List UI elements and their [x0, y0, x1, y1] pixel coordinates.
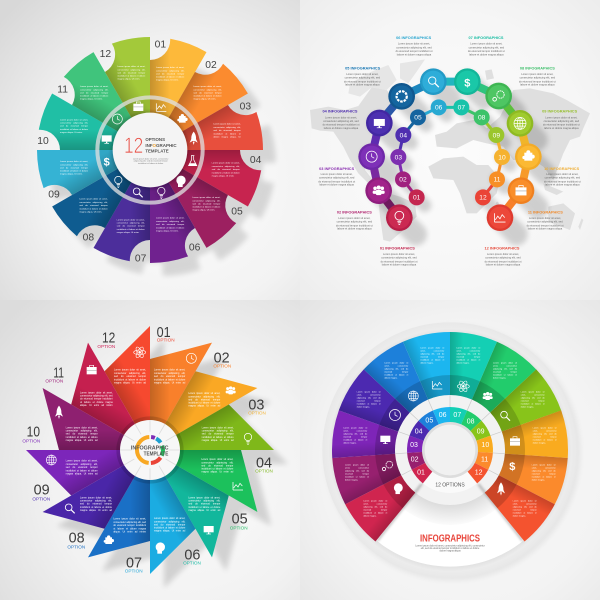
panel background [300, 0, 600, 300]
segment 12 [450, 461, 555, 546]
blade 10: OPTION [22, 438, 40, 443]
step 12: do eiusmod tempor incididunt ut [485, 260, 521, 263]
step 06: do eiusmod tempor incididunt ut [396, 50, 432, 53]
step 07: 07 INFOGRAPHICS [468, 35, 504, 40]
segment 01: Lorem ipsum dolor sit amet, consectetur adipiscing elit, sed do eiusmod tempor incididunt ut labore et dolore magna. [363, 500, 387, 517]
center title: adipiscing elit, sed do eiusmod tempor [134, 160, 168, 163]
step 12: 12 INFOGRAPHICS [484, 245, 520, 250]
blade 07 [125, 450, 196, 574]
step 11: consectetur adipiscing elit, sed [527, 220, 563, 223]
blade 07: 07 [126, 555, 142, 571]
step 03: 03 [395, 154, 402, 161]
step 01: do eiusmod tempor incididunt ut [381, 260, 417, 263]
sector 07: Lorem ipsum dolor sit amet, consectetur adipiscing elit, sed do eiusmod tempor incididunt ut labore et dolore magna aliqua. Ut enim. [117, 219, 145, 234]
sector 02: Lorem ipsum dolor sit amet, consectetur adipiscing elit, sed do eiusmod tempor incididunt ut labore et dolore magna aliqua. Ut enim. [193, 85, 222, 100]
step 04: 04 [400, 132, 407, 139]
wedge caption: dolore magna aliqua [439, 550, 461, 553]
blade 05: 05 [232, 512, 248, 528]
step 11 [489, 171, 567, 232]
blade 08: 08 [69, 531, 85, 547]
sector 02: 02 [205, 60, 217, 71]
panel background [0, 0, 300, 300]
segment 05 [364, 335, 464, 433]
step 11: do eiusmod tempor incididunt ut [527, 224, 563, 227]
sector 05 [122, 150, 246, 255]
outer chain connectors [372, 82, 528, 218]
segment 11: Lorem ipsum dolor sit amet, consectetur adipiscing elit, sed do eiusmod tempor incididunt ut labore et dolore magna. [532, 464, 556, 481]
step 09: 09 INFOGRAPHICS [542, 109, 577, 114]
inner chain connectors [398, 107, 502, 197]
segment 05: Lorem ipsum dolor sit amet, consectetur adipiscing elit, sed do eiusmod tempor incididunt ut labore et dolore magna. [384, 362, 408, 379]
segment 08: Lorem ipsum dolor sit amet, consectetur adipiscing elit, sed do eiusmod tempor incididunt ut labore et dolore magna. [493, 362, 517, 379]
blade 11: 11 [53, 365, 64, 381]
blade 02: OPTION [213, 364, 231, 369]
sector 01: 01 [155, 40, 166, 51]
step 08: do eiusmod tempor incididunt ut [519, 80, 556, 83]
sector 03 [150, 94, 275, 199]
segment 08: 08 [467, 418, 475, 425]
step 01: labore et dolore magna aliqua [382, 263, 416, 266]
step 12: consectetur adipiscing elit, sed [485, 256, 521, 259]
blade 07: OPTION [125, 569, 143, 574]
blade 05: OPTION [230, 525, 248, 530]
step 05: consectetur adipiscing elit, sed [345, 76, 380, 79]
step 09: 09 [493, 132, 500, 139]
blade 09 [32, 450, 173, 551]
step 08 [474, 65, 559, 125]
step 09 [488, 109, 583, 143]
blade 11: OPTION [45, 379, 63, 384]
step 05: 05 INFOGRAPHICS [345, 65, 380, 70]
sector 03: 03 [240, 101, 251, 112]
sector 11: Lorem ipsum dolor sit amet, consectetur adipiscing elit, sed do eiusmod tempor incididunt ut labore et dolore magna aliqua. Ut enim. [80, 85, 108, 100]
step 05: labore et dolore magna aliqua [345, 83, 380, 86]
sector 08: Lorem ipsum dolor sit amet, consectetur adipiscing elit, sed do eiusmod tempor incididunt ut labore et dolore magna aliqua. Ut enim. [79, 198, 108, 213]
step 02: Lorem ipsum dolor sit amet, [338, 217, 370, 220]
segment 01: 01 [417, 470, 425, 477]
step 07: labore et dolore magna aliqua [469, 53, 504, 56]
step 09: labore et dolore magna aliqua [544, 127, 579, 130]
panel: 12 options wheel with notched sectors [0, 0, 300, 300]
step 11: 11 [494, 177, 501, 184]
step 08: labore et dolore magna aliqua [520, 83, 555, 86]
wedge caption: Lorem ipsum dolor sit amet, consectetur adipiscing elit, consectetur [415, 544, 485, 547]
blade 09: 09 [34, 483, 50, 499]
center title: Lorem ipsum dolor sit amet, consectetur [133, 157, 169, 160]
step 08: Lorem ipsum dolor sit amet, [521, 73, 553, 76]
segment 08 [460, 342, 540, 446]
step 01: 01 INFOGRAPHICS [380, 245, 415, 250]
segment 05: 05 [425, 418, 433, 425]
step 12: labore et dolore magna aliqua [486, 263, 520, 266]
blade 12: 12 [102, 330, 115, 346]
segment 02: Lorem ipsum dolor sit amet, consectetur adipiscing elit, sed do eiusmod tempor incididunt ut labore et dolore magna. [345, 464, 369, 481]
step 06: 06 INFOGRAPHICS [396, 35, 431, 40]
step 02: 02 INFOGRAPHICS [337, 209, 372, 214]
segment 10: 10 [481, 442, 489, 449]
blade 04: OPTION [255, 469, 273, 474]
step 07: Lorem ipsum dolor sit amet, [470, 42, 502, 45]
step 07 [453, 35, 508, 115]
step 01 [377, 189, 425, 268]
blade 06: OPTION [183, 561, 201, 566]
center title [124, 133, 177, 165]
donut chart [137, 437, 163, 463]
step 08: consectetur adipiscing elit, sed [520, 76, 555, 79]
step 12 [475, 189, 525, 268]
sector 12: 12 [100, 49, 111, 60]
segment 07: Lorem ipsum dolor sit amet, consectetur adipiscing elit, sed do eiusmod tempor incididunt ut labore et dolore magna. [456, 347, 480, 364]
segment 02 [324, 420, 428, 504]
segment 03: 03 [410, 442, 418, 449]
bottom wedge edge shadows [377, 484, 523, 541]
sector 05: Lorem ipsum dolor sit amet, consectetur adipiscing elit, sed do eiusmod tempor incididunt ut labore et dolore magna aliqua. Ut enim. [192, 196, 220, 211]
step 04: do eiusmod tempor incididunt ut [323, 123, 359, 126]
wedge caption: elit, sed do eiusmod tempor incididunt ut labore et dolore [421, 547, 480, 550]
step 04: consectetur adipiscing elit, sed [323, 120, 359, 123]
step 02: 02 [399, 177, 407, 184]
step 02: do eiusmod tempor incididunt ut [336, 224, 373, 227]
panel: world map with two chains of circles [300, 0, 600, 300]
step 04: 04 INFOGRAPHICS [322, 109, 358, 114]
center title: TEMPLATE [145, 149, 169, 154]
segment 09: Lorem ipsum dolor sit amet, consectetur adipiscing elit, sed do eiusmod tempor incididunt ut labore et dolore magna. [521, 391, 545, 408]
step 07: $ [464, 78, 470, 90]
step 01: consectetur adipiscing elit, sed [381, 256, 417, 259]
sector 06 [101, 150, 206, 275]
step 09: do eiusmod tempor incididunt ut [543, 123, 580, 126]
panel background [0, 300, 300, 600]
step 03: do eiusmod tempor incididunt ut [318, 180, 355, 183]
step 04 [319, 109, 411, 143]
step 06: consectetur adipiscing elit, sed [396, 46, 432, 49]
step 07: do eiusmod tempor incididunt ut [468, 50, 505, 53]
step 01: 01 [413, 195, 421, 202]
step 11: labore et dolore magna aliqua [528, 227, 562, 230]
blade 02: 02 [214, 350, 230, 366]
sector 10: 10 [37, 136, 49, 147]
sector 11 [54, 45, 178, 150]
segment 11: $ [509, 461, 515, 473]
center disc [111, 111, 189, 189]
step 04: labore et dolore magna aliqua [324, 127, 358, 130]
sector 09 [25, 101, 150, 206]
step 05: do eiusmod tempor incididunt ut [344, 80, 381, 83]
step 06: Lorem ipsum dolor sit amet, [398, 42, 430, 45]
step 09: Lorem ipsum dolor sit amet, [545, 116, 577, 119]
sector 05: 05 [231, 206, 243, 217]
sector 12: Lorem ipsum dolor sit amet, consectetur adipiscing elit, sed do eiusmod tempor incididunt ut labore et dolore magna aliqua. Ut enim. [117, 65, 145, 80]
step 10: labore et dolore magna aliqua [545, 183, 580, 186]
center title: incididunt ut labore et dolore [138, 162, 164, 165]
sector 09: 09 [48, 189, 60, 200]
step 10: do eiusmod tempor incididunt ut [544, 180, 581, 183]
segment 11: 11 [481, 457, 488, 464]
sector 07: 07 [135, 253, 147, 264]
step 11: Lorem ipsum dolor sit amet, [529, 217, 561, 220]
circle shadows [372, 82, 545, 234]
blade 03: 03 [248, 397, 264, 413]
step 05 [341, 65, 426, 125]
sector 04 [150, 150, 262, 206]
blade 04: 04 [256, 455, 272, 471]
blade 01: OPTION [157, 338, 175, 343]
step 03: 03 INFOGRAPHICS [319, 166, 354, 171]
step 06: 06 [435, 105, 443, 112]
world map [310, 59, 590, 242]
segment 10 [473, 410, 577, 486]
translucent inner ring [97, 97, 203, 203]
segment 06: Lorem ipsum dolor sit amet, consectetur adipiscing elit, sed do eiusmod tempor incididunt ut labore et dolore magna. [420, 347, 444, 364]
step 10: 10 [498, 154, 506, 161]
step 11: 11 INFOGRAPHICS [528, 209, 563, 214]
segment 12: 12 [475, 470, 483, 477]
step 09: consectetur adipiscing elit, sed [544, 120, 579, 123]
step 02: consectetur adipiscing elit, sed [337, 220, 372, 223]
step 03: Lorem ipsum dolor sit amet, [321, 173, 353, 176]
blade 01: 01 [157, 325, 171, 341]
long shadow of wheel [38, 63, 287, 287]
segment 01 [339, 440, 434, 541]
sector 08 [45, 122, 150, 246]
step 02 [333, 171, 411, 232]
blade 10: 10 [27, 425, 40, 441]
panel: semi-circular wheel with white bottom wedge [300, 300, 600, 600]
sector 04: 04 [250, 155, 262, 166]
sector 06: Lorem ipsum dolor sit amet, consectetur adipiscing elit, sed do eiusmod tempor incididunt ut labore et dolore magna aliqua. Ut enim. [156, 217, 184, 232]
wedge caption [415, 544, 485, 553]
segment 06 [403, 323, 483, 427]
sector 02 [150, 54, 255, 178]
center title: OPTIONS [145, 137, 165, 142]
blade 06: 06 [184, 547, 200, 563]
step 12: 12 [479, 195, 487, 202]
sector 06: 06 [189, 242, 201, 253]
segment 04: Lorem ipsum dolor sit amet, consectetur adipiscing elit, sed do eiusmod tempor incididunt ut labore et dolore magna. [357, 391, 381, 408]
blade 09: OPTION [32, 496, 50, 501]
blade 08 [67, 450, 189, 580]
step 04: Lorem ipsum dolor sit amet, [325, 116, 357, 119]
step 02: labore et dolore magna aliqua [337, 227, 372, 230]
step 03: labore et dolore magna aliqua [319, 183, 354, 186]
12 options label: 12 OPTIONS [435, 482, 465, 488]
center hub: TEMPLATE [144, 451, 169, 457]
center hub [116, 416, 184, 484]
panel: pinwheel with 12 pointed blades [0, 300, 300, 600]
blade 12 [49, 330, 150, 473]
segment 10: Lorem ipsum dolor sit amet, consectetur adipiscing elit, sed do eiusmod tempor incididunt ut labore et dolore magna. [533, 427, 557, 444]
blade 03 [127, 349, 266, 450]
step 07: 07 [458, 105, 465, 112]
ring icons [102, 102, 198, 198]
segment 02: 02 [411, 456, 419, 463]
step 10 [494, 143, 584, 188]
center title: INFOGRAPHIC [145, 143, 177, 148]
step 05: 05 [414, 115, 422, 122]
blade 08: OPTION [67, 544, 85, 549]
segment 07: 07 [453, 412, 461, 419]
step 06 [392, 35, 447, 115]
sector 10 [37, 94, 150, 150]
panel background [300, 300, 600, 600]
long shadow of blades [57, 334, 294, 594]
step 10: 10 INFOGRAPHICS [544, 166, 579, 171]
step 10: Lorem ipsum dolor sit amet, [546, 173, 578, 176]
sector 10: Lorem ipsum dolor sit amet, consectetur adipiscing elit, sed do eiusmod tempor incididunt ut labore et dolore magna aliqua. Ut enim. [60, 119, 88, 134]
center title: 12 [124, 133, 143, 158]
sector 07 [94, 150, 150, 264]
segment 06: 06 [439, 412, 447, 419]
segment 03: Lorem ipsum dolor sit amet, consectetur adipiscing elit, sed do eiusmod tempor incididunt ut labore et dolore magna. [343, 427, 367, 444]
ring icons: $ [104, 157, 110, 169]
blade 10 [22, 425, 150, 496]
step 07: consectetur adipiscing elit, sed [469, 46, 504, 49]
sector 11: 11 [57, 85, 68, 96]
blade 02 [111, 320, 231, 450]
darker inner band [106, 106, 194, 194]
step 05: Lorem ipsum dolor sit amet, [346, 73, 378, 76]
step 01: Lorem ipsum dolor sit amet, [383, 253, 415, 256]
center hub: INFOGRAPHIC [131, 446, 169, 452]
blade 03: OPTION [248, 411, 266, 416]
step 03 [315, 143, 406, 188]
step 08: 08 INFOGRAPHICS [520, 65, 555, 70]
segment 11 [472, 452, 568, 505]
segment 04 [339, 366, 442, 442]
sector 12 [94, 25, 199, 150]
outer ring [322, 322, 581, 581]
sector 09: Lorem ipsum dolor sit amet, consectetur adipiscing elit, sed do eiusmod tempor incididunt ut labore et dolore magna aliqua. Ut enim. [60, 160, 88, 175]
infographics title: INFOGRAPHICS [420, 533, 480, 544]
segment 09: 09 [477, 428, 485, 435]
blade 12: OPTION [97, 344, 115, 349]
blade 11 [20, 365, 150, 489]
sector 04: Lorem ipsum dolor sit amet, consectetur adipiscing elit, sed do eiusmod tempor incididunt ut labore et dolore magna aliqua. Ut enim. [212, 162, 240, 177]
step 10: consectetur adipiscing elit, sed [545, 176, 580, 179]
sector 01 [150, 39, 206, 150]
sector 08: 08 [83, 233, 94, 244]
step 03: consectetur adipiscing elit, sed [319, 176, 354, 179]
center disc [422, 422, 478, 478]
step 12: Lorem ipsum dolor sit amet, [487, 253, 519, 256]
sector 01: Lorem ipsum dolor sit amet, consectetur adipiscing elit, sed do eiusmod tempor incididunt ut labore et dolore magna aliqua. Ut enim. [156, 66, 184, 81]
blade 01 [104, 325, 175, 450]
step 06: labore et dolore magna aliqua [397, 53, 431, 56]
step 08: 08 [478, 115, 486, 122]
blade 05 [150, 411, 280, 530]
blade 04 [150, 404, 274, 474]
segment 04: 04 [415, 428, 423, 435]
segment 03 [329, 405, 425, 458]
segment 12: Lorem ipsum dolor sit amet, consectetur adipiscing elit, sed do eiusmod tempor incididunt ut labore et dolore magna. [513, 500, 537, 517]
segment 09 [468, 369, 568, 467]
segment 07 [450, 332, 497, 425]
blade 06 [150, 427, 251, 566]
